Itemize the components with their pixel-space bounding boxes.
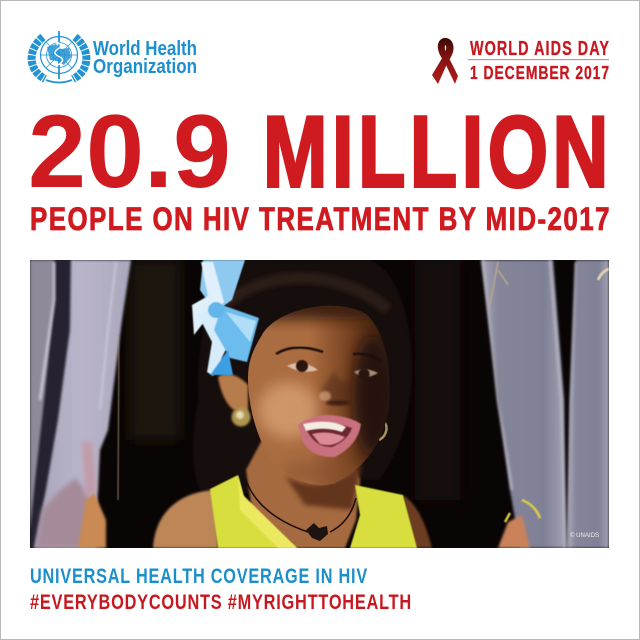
text: World Health Organization: World Health (93, 38, 197, 60)
eyebrows (276, 347, 323, 354)
icon: WHO emblem (32, 31, 86, 82)
ear and earring (218, 374, 386, 440)
hair (193, 260, 412, 495)
neck and chest (246, 440, 360, 548)
text: World Health Organization (93, 38, 197, 78)
nose (320, 370, 354, 405)
World AIDS Day badge (432, 38, 610, 84)
face (248, 306, 390, 486)
footer line: hashtags: #EVERYBODYCOUNTS #MYRIGHTTOHEALTH (30, 591, 412, 614)
WHO logo (32, 31, 197, 82)
text: World Health Organization: Organization (93, 56, 197, 78)
photo: smiling girl between curtains (30, 260, 609, 548)
footer line: universal health coverage: UNIVERSAL HEALTH COVERAGE IN HIV (30, 565, 368, 588)
necklace (245, 478, 356, 541)
eyes (287, 363, 318, 372)
hair bow (192, 260, 259, 376)
left hand (36, 478, 100, 548)
left curtain (30, 260, 131, 548)
arms and shoulders (153, 490, 218, 548)
mouth (298, 415, 361, 457)
right curtain (481, 260, 609, 548)
photo credit: © UNAIDS (570, 532, 599, 539)
right hand (498, 515, 530, 548)
main heading: 20.9 million (28, 94, 613, 210)
top (210, 475, 417, 548)
icon: red ribbon (432, 38, 458, 84)
main heading: 20.9 million: 20.9 (28, 94, 231, 210)
